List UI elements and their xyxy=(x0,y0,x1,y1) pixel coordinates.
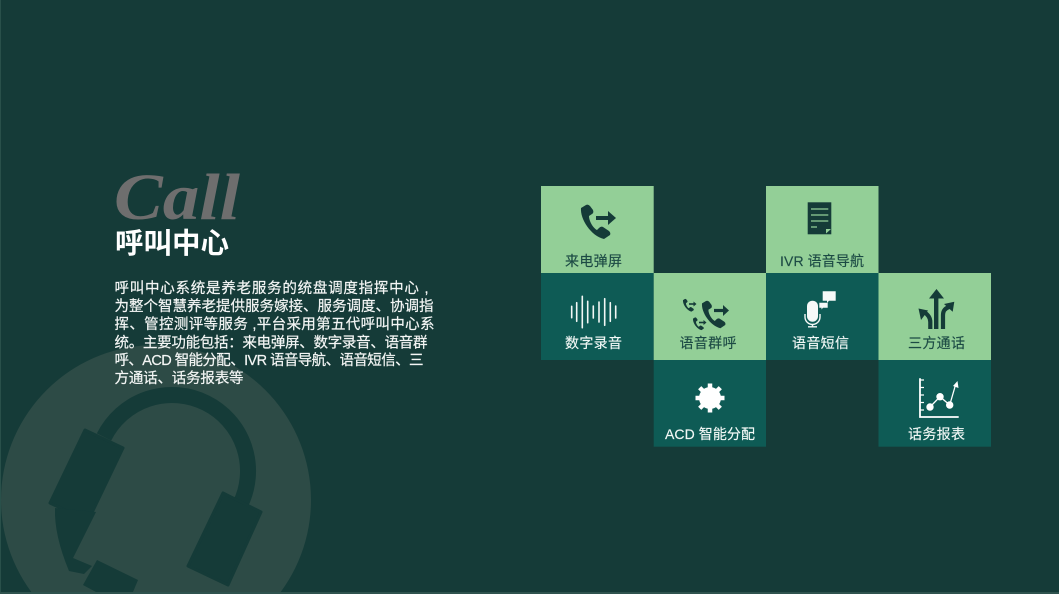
tile: 话务报表 xyxy=(878,360,991,447)
icon: document xyxy=(808,202,831,234)
icon: sound wave xyxy=(572,296,616,328)
description text: 呼叫中心系统是养老服务的统盘调度指挥中心 , xyxy=(114,279,428,297)
tile: 三方通话: 三方通话 xyxy=(908,335,965,351)
icon: three direction arrows xyxy=(918,289,954,329)
tile: 语音短信 xyxy=(766,273,878,360)
description text: 方通话、话务报表等 xyxy=(114,369,244,387)
description text xyxy=(114,279,434,387)
tile: ACD 智能分配: ACD 智能分配 xyxy=(665,426,755,442)
tile: 来电弹屏 xyxy=(541,186,654,273)
tile: 话务报表: 话务报表 xyxy=(908,426,965,442)
tile: ACD 智能分配 xyxy=(654,360,766,447)
description text: 为整个智慧养老提供服务嫁接、服务调度、协调指 xyxy=(114,298,434,315)
icon: phone with arrow xyxy=(581,205,616,239)
tile: 语音群呼 xyxy=(654,273,766,360)
tile: 来电弹屏: 来电弹屏 xyxy=(565,253,622,269)
description text: 挥、管控测评等服务 ,平台采用第五代呼叫中心系 xyxy=(114,315,434,333)
icon: microphone with bubbles xyxy=(805,291,836,327)
icon: group call phones xyxy=(683,299,729,330)
icon: line chart xyxy=(920,378,959,417)
tile: 数字录音: 数字录音 xyxy=(565,335,622,351)
tile: 三方通话 xyxy=(878,273,991,360)
description text: 统。主要功能包括：来电弹屏、数字录音、语音群 xyxy=(114,334,428,352)
tile: 语音群呼: 语音群呼 xyxy=(680,335,736,351)
title: 呼叫中心 xyxy=(115,228,229,260)
tile: IVR 语音导航: IVR 语音导航 xyxy=(780,253,864,269)
tile: 数字录音 xyxy=(541,273,654,360)
watermark: headset in circle xyxy=(1,345,311,592)
tile: IVR 语音导航 xyxy=(766,186,878,273)
description text: 呼、ACD 智能分配、IVR 语音导航、语音短信、三 xyxy=(114,352,424,369)
tile: 语音短信: 语音短信 xyxy=(792,335,849,351)
icon: gear xyxy=(696,384,724,412)
script word: Call: Call xyxy=(114,161,241,234)
